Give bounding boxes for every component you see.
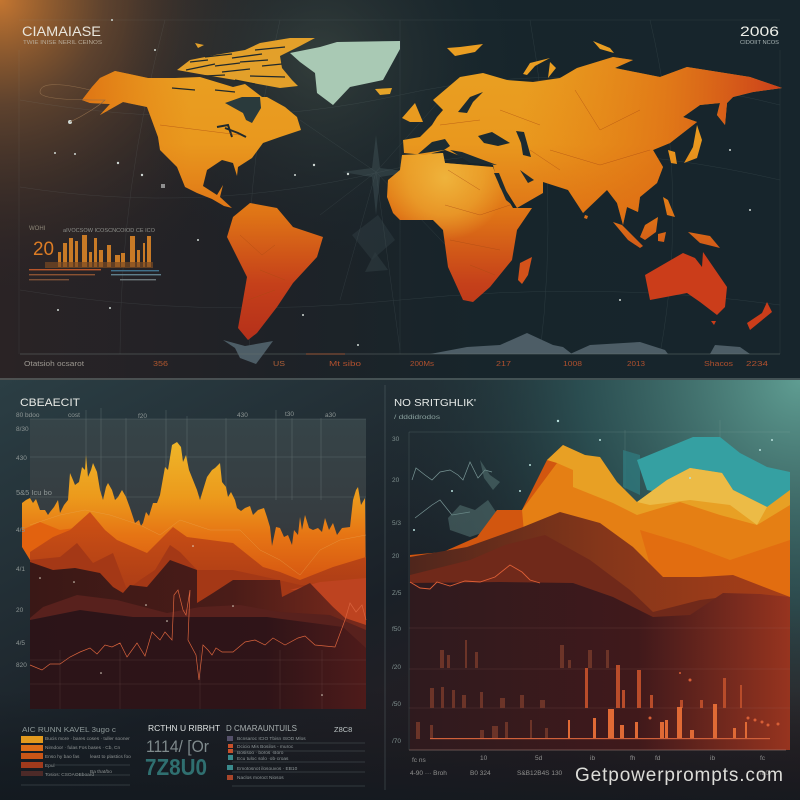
small overlaid line chart [412, 462, 492, 518]
inset mini bar chart: 20 [33, 239, 54, 260]
key figures: 1114/ [Or [146, 737, 209, 756]
inset mini bar chart: aIVOCSOW ICOSCNCOIOD CE ICO [63, 228, 156, 234]
left chart axis labels: 80 bdoo [16, 412, 40, 419]
left chart axis labels: t30 [285, 411, 294, 418]
right chart y labels [392, 436, 402, 745]
legend: Bucis more · bares coses · tuller sooner [45, 736, 130, 742]
legend: Tosios: CSOAOEboard [45, 772, 94, 778]
continent: Africa [387, 153, 532, 302]
panel: left area chart [16, 397, 366, 709]
continent: North America [82, 71, 301, 208]
right chart y labels: 20 [392, 477, 400, 484]
map footer axis: 2013 [627, 359, 645, 368]
map footer axis: 217 [496, 359, 511, 368]
left chart axis labels: 8/30 [16, 426, 29, 433]
left chart axis labels [16, 411, 336, 669]
right key table: Z8C8 [334, 725, 352, 734]
Madagascar [518, 257, 532, 284]
map footer axis [20, 354, 780, 368]
right chart heading: / dddidrodos [394, 414, 441, 421]
right chart y labels: 30 [392, 436, 400, 443]
year label [740, 23, 779, 46]
right chart x labels: 10 [480, 755, 488, 762]
panel: left footer tables [21, 723, 365, 786]
watermark: Getpowerprompts.com [575, 765, 783, 786]
right chart y labels: /50 [392, 701, 401, 708]
compass star [342, 135, 410, 272]
brown series [410, 512, 790, 660]
Antarctica [223, 333, 750, 364]
right chart axis [409, 749, 786, 751]
right key table: Bosisoo · boros ·Boro [237, 750, 284, 756]
right chart x labels: fc ns [412, 757, 426, 764]
left chart axis labels: 4/5 [16, 527, 25, 534]
right chart x labels: fb0 [760, 770, 769, 777]
rust series [410, 535, 790, 660]
background: top panel [0, 0, 800, 380]
continent: Eurasia [403, 57, 782, 225]
legend: Nimdoor · fulas Fos bases · Cb, Cn [45, 745, 121, 751]
left chart axis labels: 20 [16, 607, 24, 614]
vertical divider [384, 385, 386, 790]
right chart y labels: f50 [392, 626, 401, 633]
right chart x labels: fc [760, 755, 766, 762]
right chart y labels: 20 [392, 553, 400, 560]
right key table: Naclos moroct Niosos [237, 775, 284, 781]
right chart x labels: ib [710, 755, 715, 762]
gridlines [30, 408, 366, 500]
left chart axis labels: f20 [138, 413, 147, 420]
orange series [522, 463, 790, 600]
left chart axis labels: a30 [325, 412, 336, 419]
right chart heading [394, 398, 476, 421]
deep orange lower [640, 530, 790, 600]
Canadian Arctic islands [177, 38, 315, 88]
map data points [54, 19, 751, 346]
map footer axis: 2234 [746, 359, 768, 368]
deep orange base [410, 445, 700, 600]
left chart axis labels: 4/1 [16, 566, 25, 573]
map footer axis: Otatsioh ocsarot [24, 359, 85, 368]
right chart x labels: S&B12B4S 130 [517, 770, 563, 777]
teal series [623, 450, 640, 495]
right chart x labels [410, 755, 769, 777]
yellow jagged series [22, 442, 366, 600]
rust series [30, 543, 366, 660]
right chart y labels: Z/5 [392, 590, 402, 597]
inset mini bar chart [29, 226, 161, 280]
left chart heading: CBEAECIT [20, 397, 80, 409]
left chart axis labels: 430 [16, 455, 27, 462]
legend: AIC RUNN KAVEL 3ugo c [22, 725, 116, 734]
right red patch [290, 578, 366, 625]
key figures: RCTHN U RIBRHT [148, 723, 220, 733]
right chart y labels: /70 [392, 738, 401, 745]
legend: Enso hy bao fas [45, 754, 80, 760]
Great Lakes [217, 125, 246, 137]
legend: least to plastics foo [90, 754, 131, 760]
maroon series [410, 582, 790, 750]
map title: TWIE INISE NERIL CEINOS [23, 40, 102, 46]
map title [22, 24, 102, 46]
spatter texture [448, 460, 500, 537]
left chart axis labels: cost [68, 412, 80, 419]
right chart x labels: fd [655, 755, 661, 762]
legend [21, 725, 131, 785]
right key table: Bcnsaroc ICIO Tbisn ISOD Mlos [237, 736, 306, 742]
lower gridlines [30, 650, 366, 709]
orange trace line [410, 565, 540, 589]
Iceland [375, 88, 392, 95]
maroon series [30, 560, 366, 709]
chart specks [39, 545, 323, 696]
left chart axis labels: 5&5 Icu bo [16, 488, 52, 497]
left chart axis labels: 820 [16, 662, 27, 669]
map footer axis: 356 [153, 359, 168, 368]
mid brown band [30, 595, 366, 650]
left chart axis labels: 430 [237, 412, 248, 419]
right chart y labels: 5/3 [392, 520, 401, 527]
line series [30, 590, 366, 680]
islands [402, 103, 720, 248]
right chart x labels: 5d [535, 755, 543, 762]
gridlines [409, 628, 790, 708]
legend: Epul [45, 763, 55, 769]
plot background [30, 419, 366, 709]
right chart heading: NO SRITGHLIK' [394, 398, 476, 409]
right chart x labels: B0 324 [470, 770, 491, 777]
right key table: Emotosnot ilosouvos · EB10 [237, 766, 298, 772]
right plot grid [409, 420, 790, 750]
map footer axis: Shacos [704, 359, 733, 368]
key figures [145, 723, 220, 780]
key figures: 7Z8U0 [145, 754, 207, 780]
Greenland [290, 41, 400, 105]
map footer axis: US [273, 359, 285, 368]
background: bottom panel [0, 378, 800, 800]
legend: Ba that/bo [90, 769, 112, 775]
dark base [30, 610, 366, 709]
right chart y labels: /20 [392, 664, 401, 671]
bar series [416, 640, 609, 739]
right chart x labels: fh [630, 755, 636, 762]
seas [418, 92, 534, 205]
year label: CIDOIIT NCOS [740, 40, 779, 46]
orange series [30, 512, 366, 640]
Australia [645, 252, 727, 315]
Sahara highlight [387, 153, 532, 302]
map title: CIAMAIASE [22, 24, 101, 39]
bright orange band at left [22, 522, 75, 560]
border lines [160, 90, 650, 300]
map footer axis: 200Ms [410, 359, 434, 368]
left chart axis labels: 4/5 [16, 640, 25, 647]
year label: 2006 [740, 23, 779, 39]
inset mini bar chart: WOHI [29, 226, 46, 232]
map footer axis: Mt sibo [329, 359, 361, 368]
right key table: D CMARAUNTUILS [226, 724, 297, 733]
right key table: Ecu tuloc solo ·ob·croas [237, 756, 289, 762]
continent: South America [227, 203, 323, 340]
panel: right area chart [392, 398, 790, 777]
teal specks [413, 420, 773, 531]
panel: world map [19, 19, 782, 368]
right key table: Dcicio Mis Bosilos - muroc [237, 744, 294, 750]
scattered trailing dots [648, 672, 780, 726]
gold series [547, 445, 790, 600]
Hudson Bay [225, 97, 261, 123]
right chart x labels: ib [590, 755, 595, 762]
right chart x labels: 4-90 ··· Broh [410, 770, 447, 777]
map footer axis: 1008 [563, 359, 582, 368]
right key table [226, 724, 365, 786]
